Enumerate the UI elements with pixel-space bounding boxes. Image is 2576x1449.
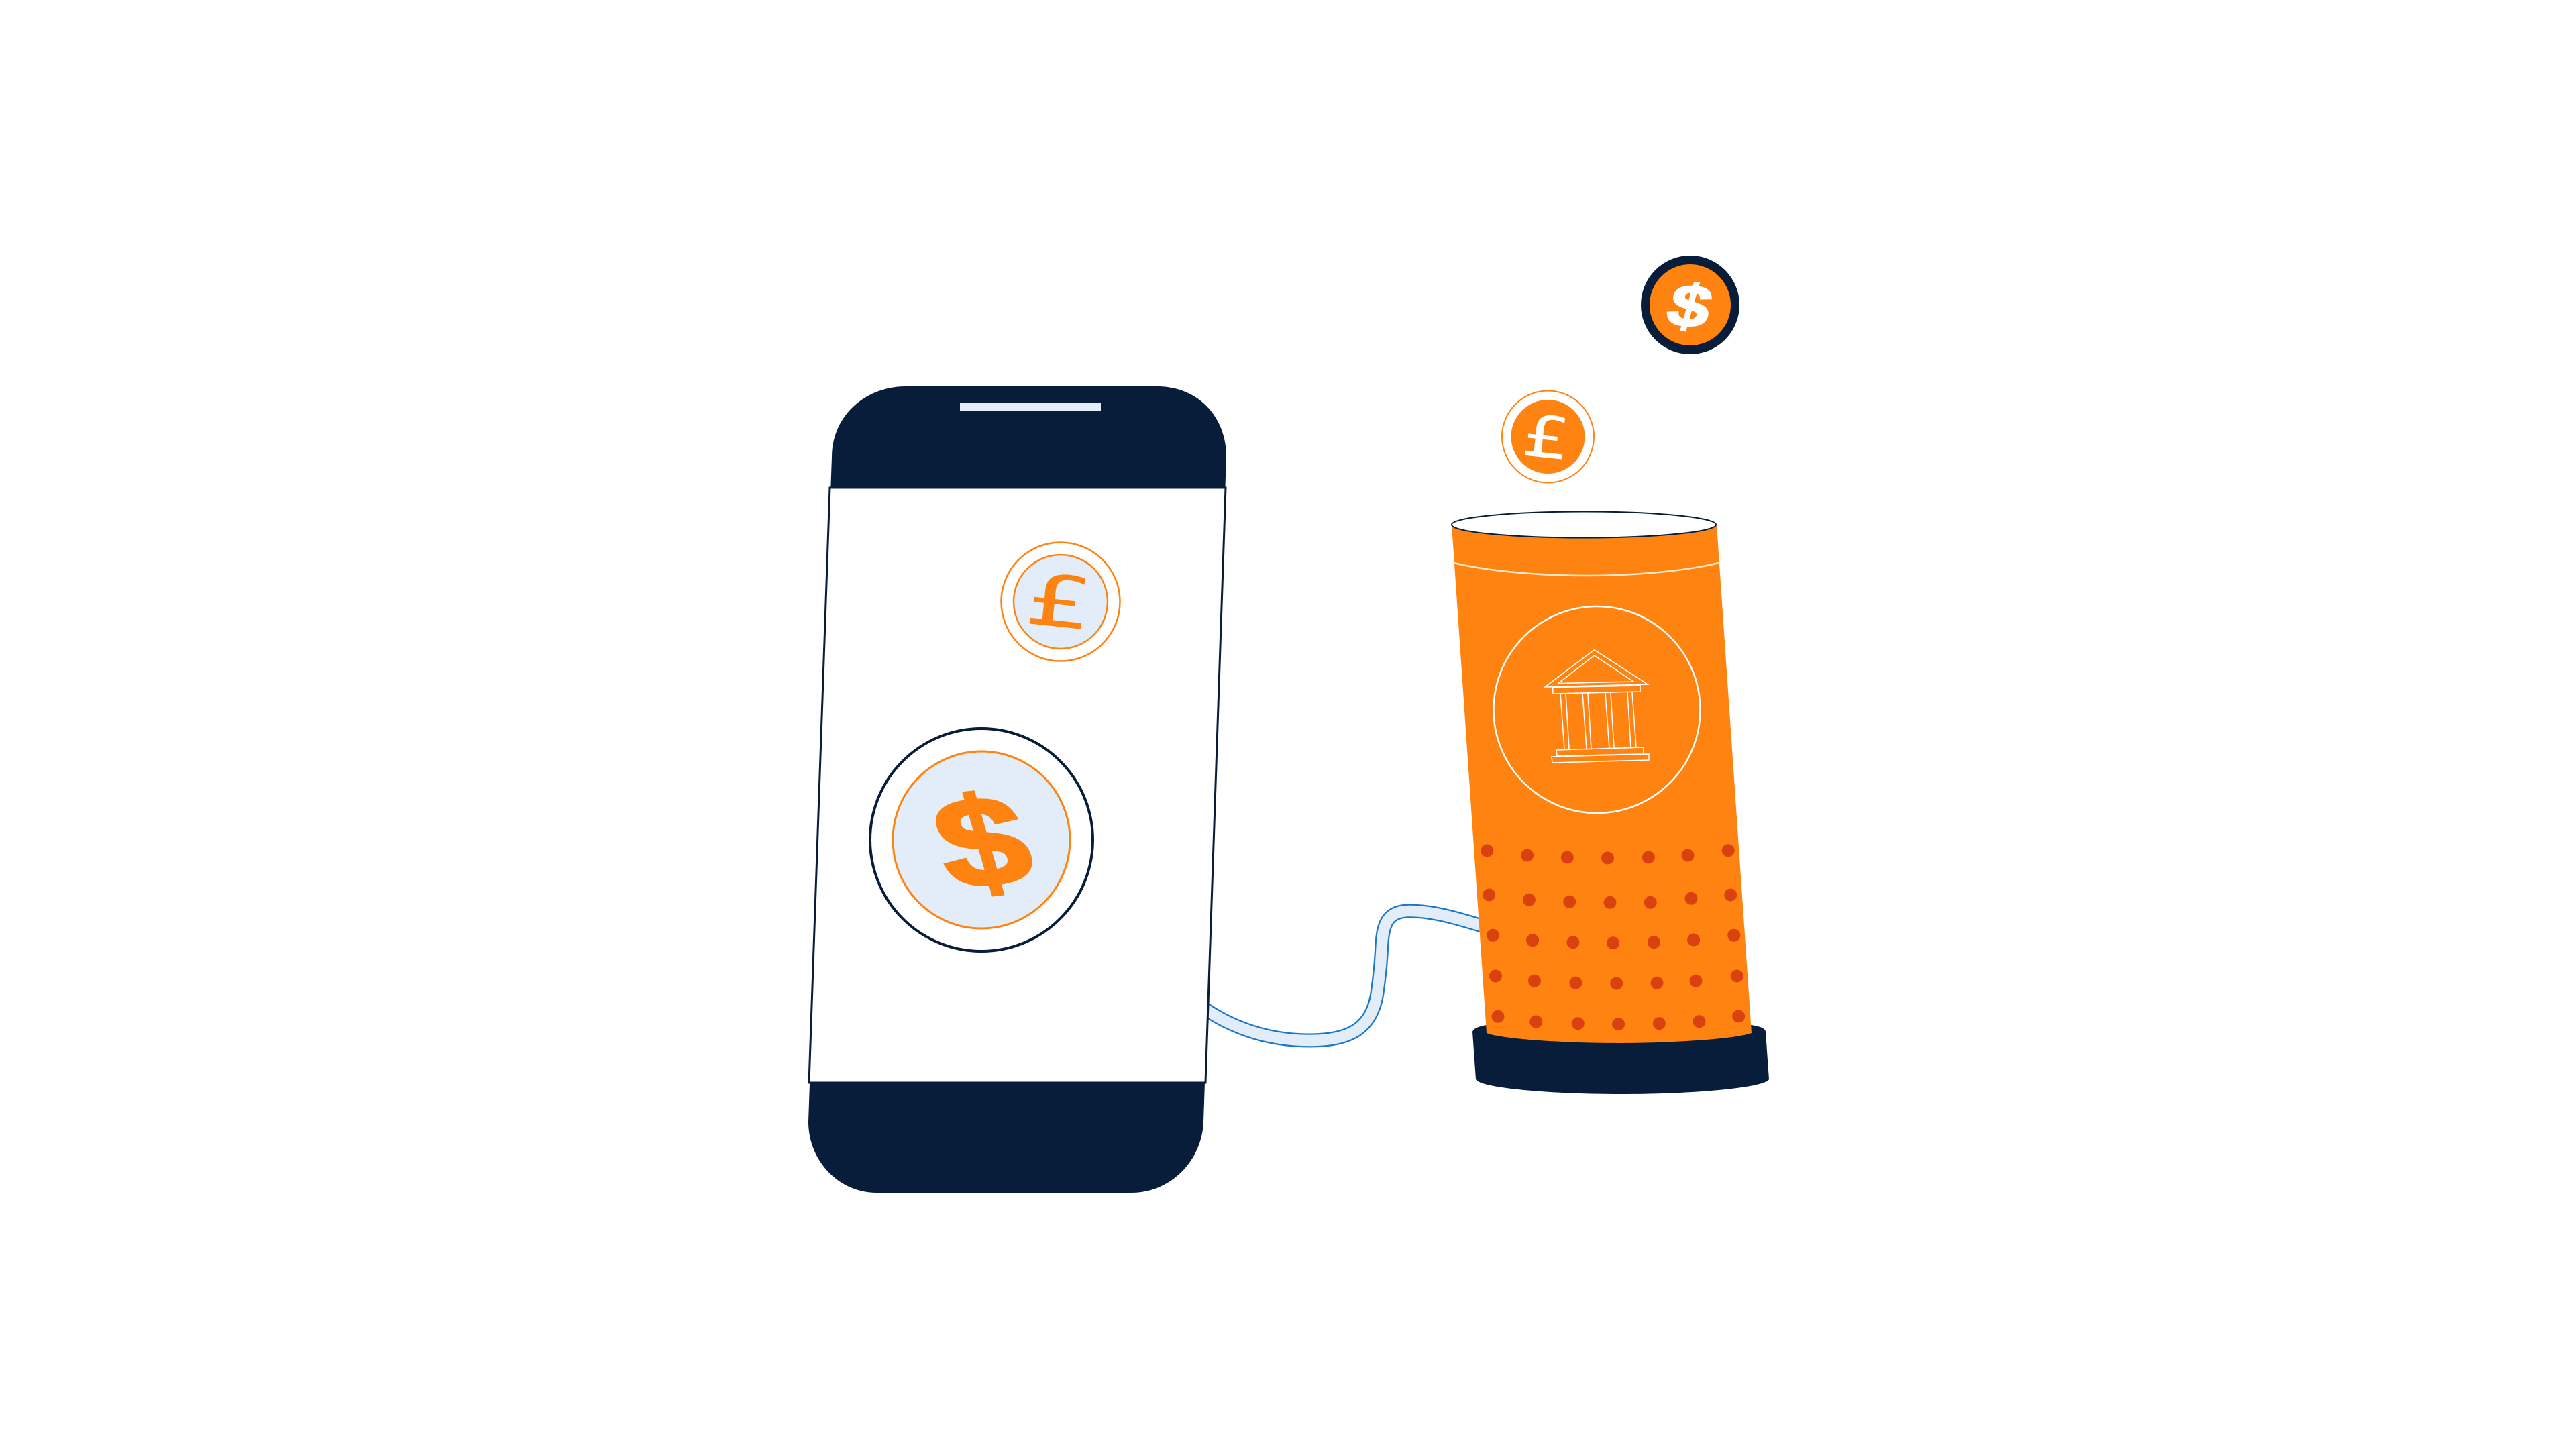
dollar coin on screen: $	[919, 768, 1046, 916]
falling dollar coin: $	[1660, 272, 1719, 341]
bank deposit base	[1472, 1025, 1769, 1094]
cylinder rim	[1452, 511, 1716, 538]
cylinder band	[1454, 563, 1719, 576]
bank cylinder	[1452, 511, 1752, 1043]
dollar coin on screen	[870, 729, 1093, 951]
falling dollar coin	[1645, 260, 1735, 350]
pound coin on screen: £	[1021, 557, 1097, 647]
decorative dots	[1481, 844, 1745, 1030]
falling pound coin: £	[1519, 402, 1574, 474]
phone screen	[809, 488, 1226, 1083]
connecting cable	[1201, 911, 1486, 1040]
falling pound coin	[1502, 390, 1594, 483]
icon: bank building	[1545, 650, 1649, 763]
smartphone	[808, 386, 1226, 1193]
pound coin on screen	[1001, 542, 1120, 661]
speaker	[960, 402, 1101, 411]
cylinder body	[1452, 525, 1752, 1043]
bank emblem circle	[1493, 606, 1700, 813]
phone body	[808, 386, 1226, 1193]
